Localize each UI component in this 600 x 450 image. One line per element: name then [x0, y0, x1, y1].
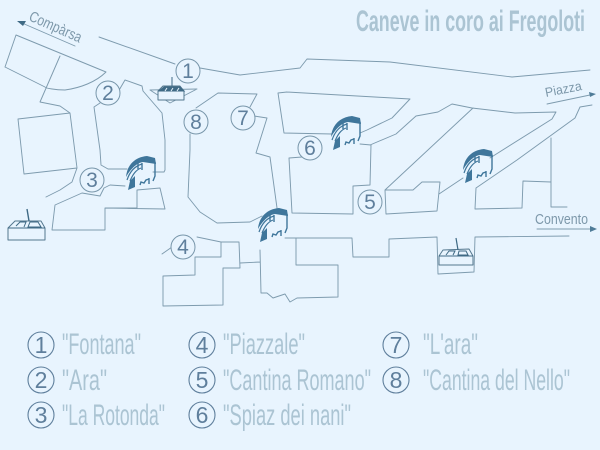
map marker 8: 8 — [190, 111, 202, 134]
legend item 5 — [189, 364, 371, 397]
legend item 7: "L'ara" — [423, 328, 478, 361]
arrow: Piazza: Piazza — [544, 78, 584, 100]
legend item 7 — [383, 328, 478, 361]
singer head icon central — [258, 208, 288, 242]
map — [5, 8, 597, 306]
map marker 8 — [184, 110, 208, 134]
arrow: Comparsa: Compàrsa — [26, 8, 85, 47]
map marker 6 — [298, 136, 322, 160]
legend item 3: 3 — [35, 402, 47, 428]
arrow: Comparsa — [17, 8, 85, 47]
map marker 1 — [176, 59, 200, 83]
arrow: Convento: Convento — [535, 211, 588, 228]
legend item 6 — [189, 399, 351, 432]
map marker 7 — [231, 106, 255, 130]
arrow: Piazza — [544, 78, 596, 104]
singer head icon 6 — [331, 116, 361, 150]
legend item 1: "Fontana" — [62, 328, 141, 361]
legend item 2: 2 — [35, 367, 47, 393]
fountain icon: top — [150, 77, 197, 103]
map marker 5 — [358, 190, 382, 214]
map marker 4 — [171, 235, 195, 259]
fountain icon: left — [8, 209, 45, 240]
map marker 1: 1 — [182, 60, 194, 83]
legend item 6: 6 — [196, 402, 208, 428]
map marker 2 — [96, 81, 120, 105]
legend item 3 — [28, 399, 165, 432]
legend item 4 — [189, 328, 305, 361]
map marker 3: 3 — [86, 169, 98, 192]
map marker 2: 2 — [102, 82, 114, 105]
legend item 4: "Piazzale" — [223, 328, 305, 361]
map marker 3 — [80, 168, 104, 192]
legend item 1 — [28, 328, 141, 361]
legend item 1: 1 — [35, 332, 47, 358]
map marker 7: 7 — [237, 107, 249, 130]
legend item 7: 7 — [390, 332, 402, 358]
legend item 4: 4 — [196, 332, 209, 358]
legend item 5: "Cantina Romano" — [223, 364, 371, 397]
legend item 8: 8 — [390, 367, 402, 393]
map marker 4: 4 — [177, 236, 189, 259]
legend item 5: 5 — [196, 367, 208, 393]
fountain icon: bottom — [439, 238, 473, 265]
map outlines: roads and buildings — [5, 35, 592, 306]
singer head icon right — [463, 149, 493, 183]
legend item 6: "Spiaz dei nani" — [223, 399, 351, 432]
legend — [28, 328, 570, 432]
legend item 2: "Ara" — [62, 364, 107, 397]
legend item 8 — [383, 364, 570, 397]
legend item 2 — [28, 364, 107, 397]
singer head icon 3 — [126, 156, 156, 190]
map marker 6: 6 — [304, 137, 316, 160]
legend item 3: "La Rotonda" — [62, 399, 165, 432]
map marker 5: 5 — [364, 191, 376, 214]
